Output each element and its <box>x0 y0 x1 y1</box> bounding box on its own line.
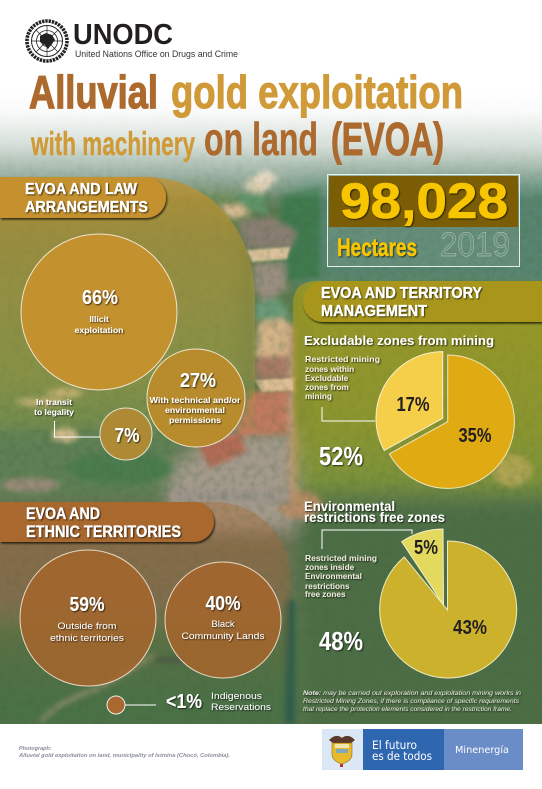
bubble: 40% black community lands: Black <box>211 619 235 630</box>
title <box>29 66 463 165</box>
panel tint <box>0 502 290 700</box>
bubble: 66% illicit exploitation <box>21 234 177 390</box>
subheading: environmental restrictions free zones: restrictions free zones <box>304 510 445 525</box>
callout: restricted mining zones within excludable zones: 52% <box>319 441 363 471</box>
heading banner: EVOA AND LAW <box>25 181 138 198</box>
heading banner: EVOA AND <box>26 504 100 523</box>
bubble: 59% outside ethnic territories: ethnic territories <box>50 633 124 644</box>
bubble: 7% in transit to legality: 7% <box>114 425 140 447</box>
callout: restricted mining zones within excludable zones: mining <box>305 392 332 401</box>
title: gold exploitation <box>171 66 463 118</box>
heading banner: ARRANGEMENTS <box>25 199 148 216</box>
title: on land <box>204 113 318 165</box>
photo caption: Alluvial gold exploitation on land, municipality of Istmina (Chocó, Colombia). <box>18 753 230 759</box>
bubble: 40% black community lands: Community Lands <box>182 631 265 642</box>
callout: restricted mining zones within excludable zones <box>305 355 380 471</box>
photo caption: Photograph: <box>19 746 52 752</box>
logo: El futuro es de todos / Minenergía <box>322 729 523 770</box>
stat box: 98,028 hectares 2019 <box>328 173 520 266</box>
logo: El futuro es de todos / Minenergía: es de todos <box>372 749 432 763</box>
callout: restricted mining zones inside environmental restrictions: zones inside <box>305 563 355 572</box>
panel: EVOA and law arrangements <box>0 177 255 460</box>
bubble: under 1% indigenous reservations: <1% <box>166 691 202 713</box>
icon: UN emblem <box>27 21 67 61</box>
callout: restricted mining zones inside environmental restrictions: restrictions <box>305 582 350 591</box>
bubble: 27% with permissions: 27% <box>180 370 216 392</box>
bubble: under 1% indigenous reservations: Indigenous <box>211 691 262 702</box>
bubble: 7% in transit to legality: to legality <box>34 407 74 417</box>
panel tint <box>293 281 542 510</box>
callout: restricted mining zones within excludable zones: Restricted mining <box>305 355 380 364</box>
heading banner <box>303 281 542 322</box>
bubble: 40% black community lands <box>165 562 281 678</box>
stat box: 98,028 hectares 2019: Hectares <box>337 234 417 262</box>
callout: restricted mining zones within excludable zones: zones within <box>305 365 354 374</box>
bubble: 59% outside ethnic territories: 59% <box>70 594 105 616</box>
subheading: environmental restrictions free zones: Environmental <box>304 499 395 514</box>
pie chart: excludable zones: 35% <box>458 425 492 447</box>
bubble: 66% illicit exploitation: Illicit <box>89 314 109 324</box>
note: Note: may be carried out exploration and exploitation mining works in <box>303 690 521 697</box>
logo: UNODC: United Nations Office on Drugs and Crime <box>75 49 238 59</box>
note: that replace the protection elements considered in the restriction frame. <box>303 706 512 713</box>
stat box: 98,028 hectares 2019: 2019 <box>440 226 510 264</box>
logo: El futuro es de todos / Minenergía: El futuro <box>372 738 417 752</box>
note <box>303 690 521 713</box>
bubble: under 1% indigenous reservations: Reservations <box>211 702 271 713</box>
heading banner <box>0 502 214 542</box>
heading banner: EVOA AND TERRITORY <box>321 285 483 302</box>
subheading: excludable zones: Excludable zones from mining <box>304 333 494 348</box>
bubble: 27% with permissions: environmental <box>165 405 225 415</box>
heading banner: ETHNIC TERRITORIES <box>26 522 181 541</box>
bubble: 66% illicit exploitation: 66% <box>82 287 118 309</box>
bubble: 27% with permissions <box>147 349 245 447</box>
panel tint <box>0 177 255 430</box>
callout: restricted mining zones inside environmental restrictions: 48% <box>319 626 363 656</box>
callout: restricted mining zones within excludable zones: zones from <box>305 383 349 392</box>
bubble: 7% in transit to legality <box>34 397 152 460</box>
note: Restricted Mining Zones, if there is compliance of specific requirements <box>303 698 520 705</box>
logo: UNODC: UNODC <box>73 19 173 51</box>
logo: UNODC <box>27 19 238 61</box>
pie chart: environmental restrictions: 43% <box>453 617 487 639</box>
title: (EVOA) <box>331 113 444 165</box>
callout: restricted mining zones inside environmental restrictions: Environmental <box>305 572 362 581</box>
bubble: 40% black community lands: 40% <box>206 593 241 615</box>
panel: EVOA and territory management <box>293 281 542 713</box>
pie chart: environmental restrictions: 5% <box>414 537 438 559</box>
bubble: 66% illicit exploitation: exploitation <box>74 325 124 335</box>
icon: Colombian coat of arms <box>329 736 355 767</box>
panel: EVOA and ethnic territories <box>0 502 290 714</box>
bubble: 27% with permissions: permissions <box>169 415 221 425</box>
callout: restricted mining zones inside environmental restrictions: free zones <box>305 590 346 599</box>
pie chart: environmental restrictions <box>380 529 517 678</box>
subheading: environmental restrictions free zones <box>304 499 445 525</box>
callout: restricted mining zones inside environmental restrictions <box>305 530 412 656</box>
photo caption <box>18 746 230 759</box>
river and mining pits <box>278 185 322 281</box>
heading banner <box>0 177 166 218</box>
pie chart: excludable zones <box>376 352 514 488</box>
bubble: 59% outside ethnic territories: Outside from <box>58 621 117 632</box>
pie chart: excludable zones: 17% <box>396 394 430 416</box>
callout: restricted mining zones inside environmental restrictions: Restricted mining <box>305 554 377 563</box>
bubble: 7% in transit to legality: In transit <box>36 397 72 407</box>
title: Alluvial <box>29 66 158 118</box>
bubble: 59% outside ethnic territories <box>20 550 156 686</box>
title: with machinery <box>30 125 195 162</box>
bubble: 27% with permissions: With technical and/or <box>150 395 241 405</box>
logo: El futuro es de todos / Minenergía: Minenergía <box>455 744 509 756</box>
heading banner: MANAGEMENT <box>321 303 427 320</box>
stat box: 98,028 hectares 2019: 98,028 <box>340 173 508 229</box>
bubble: under 1% indigenous reservations <box>107 691 271 714</box>
callout: restricted mining zones within excludable zones: Excludable <box>305 374 349 383</box>
